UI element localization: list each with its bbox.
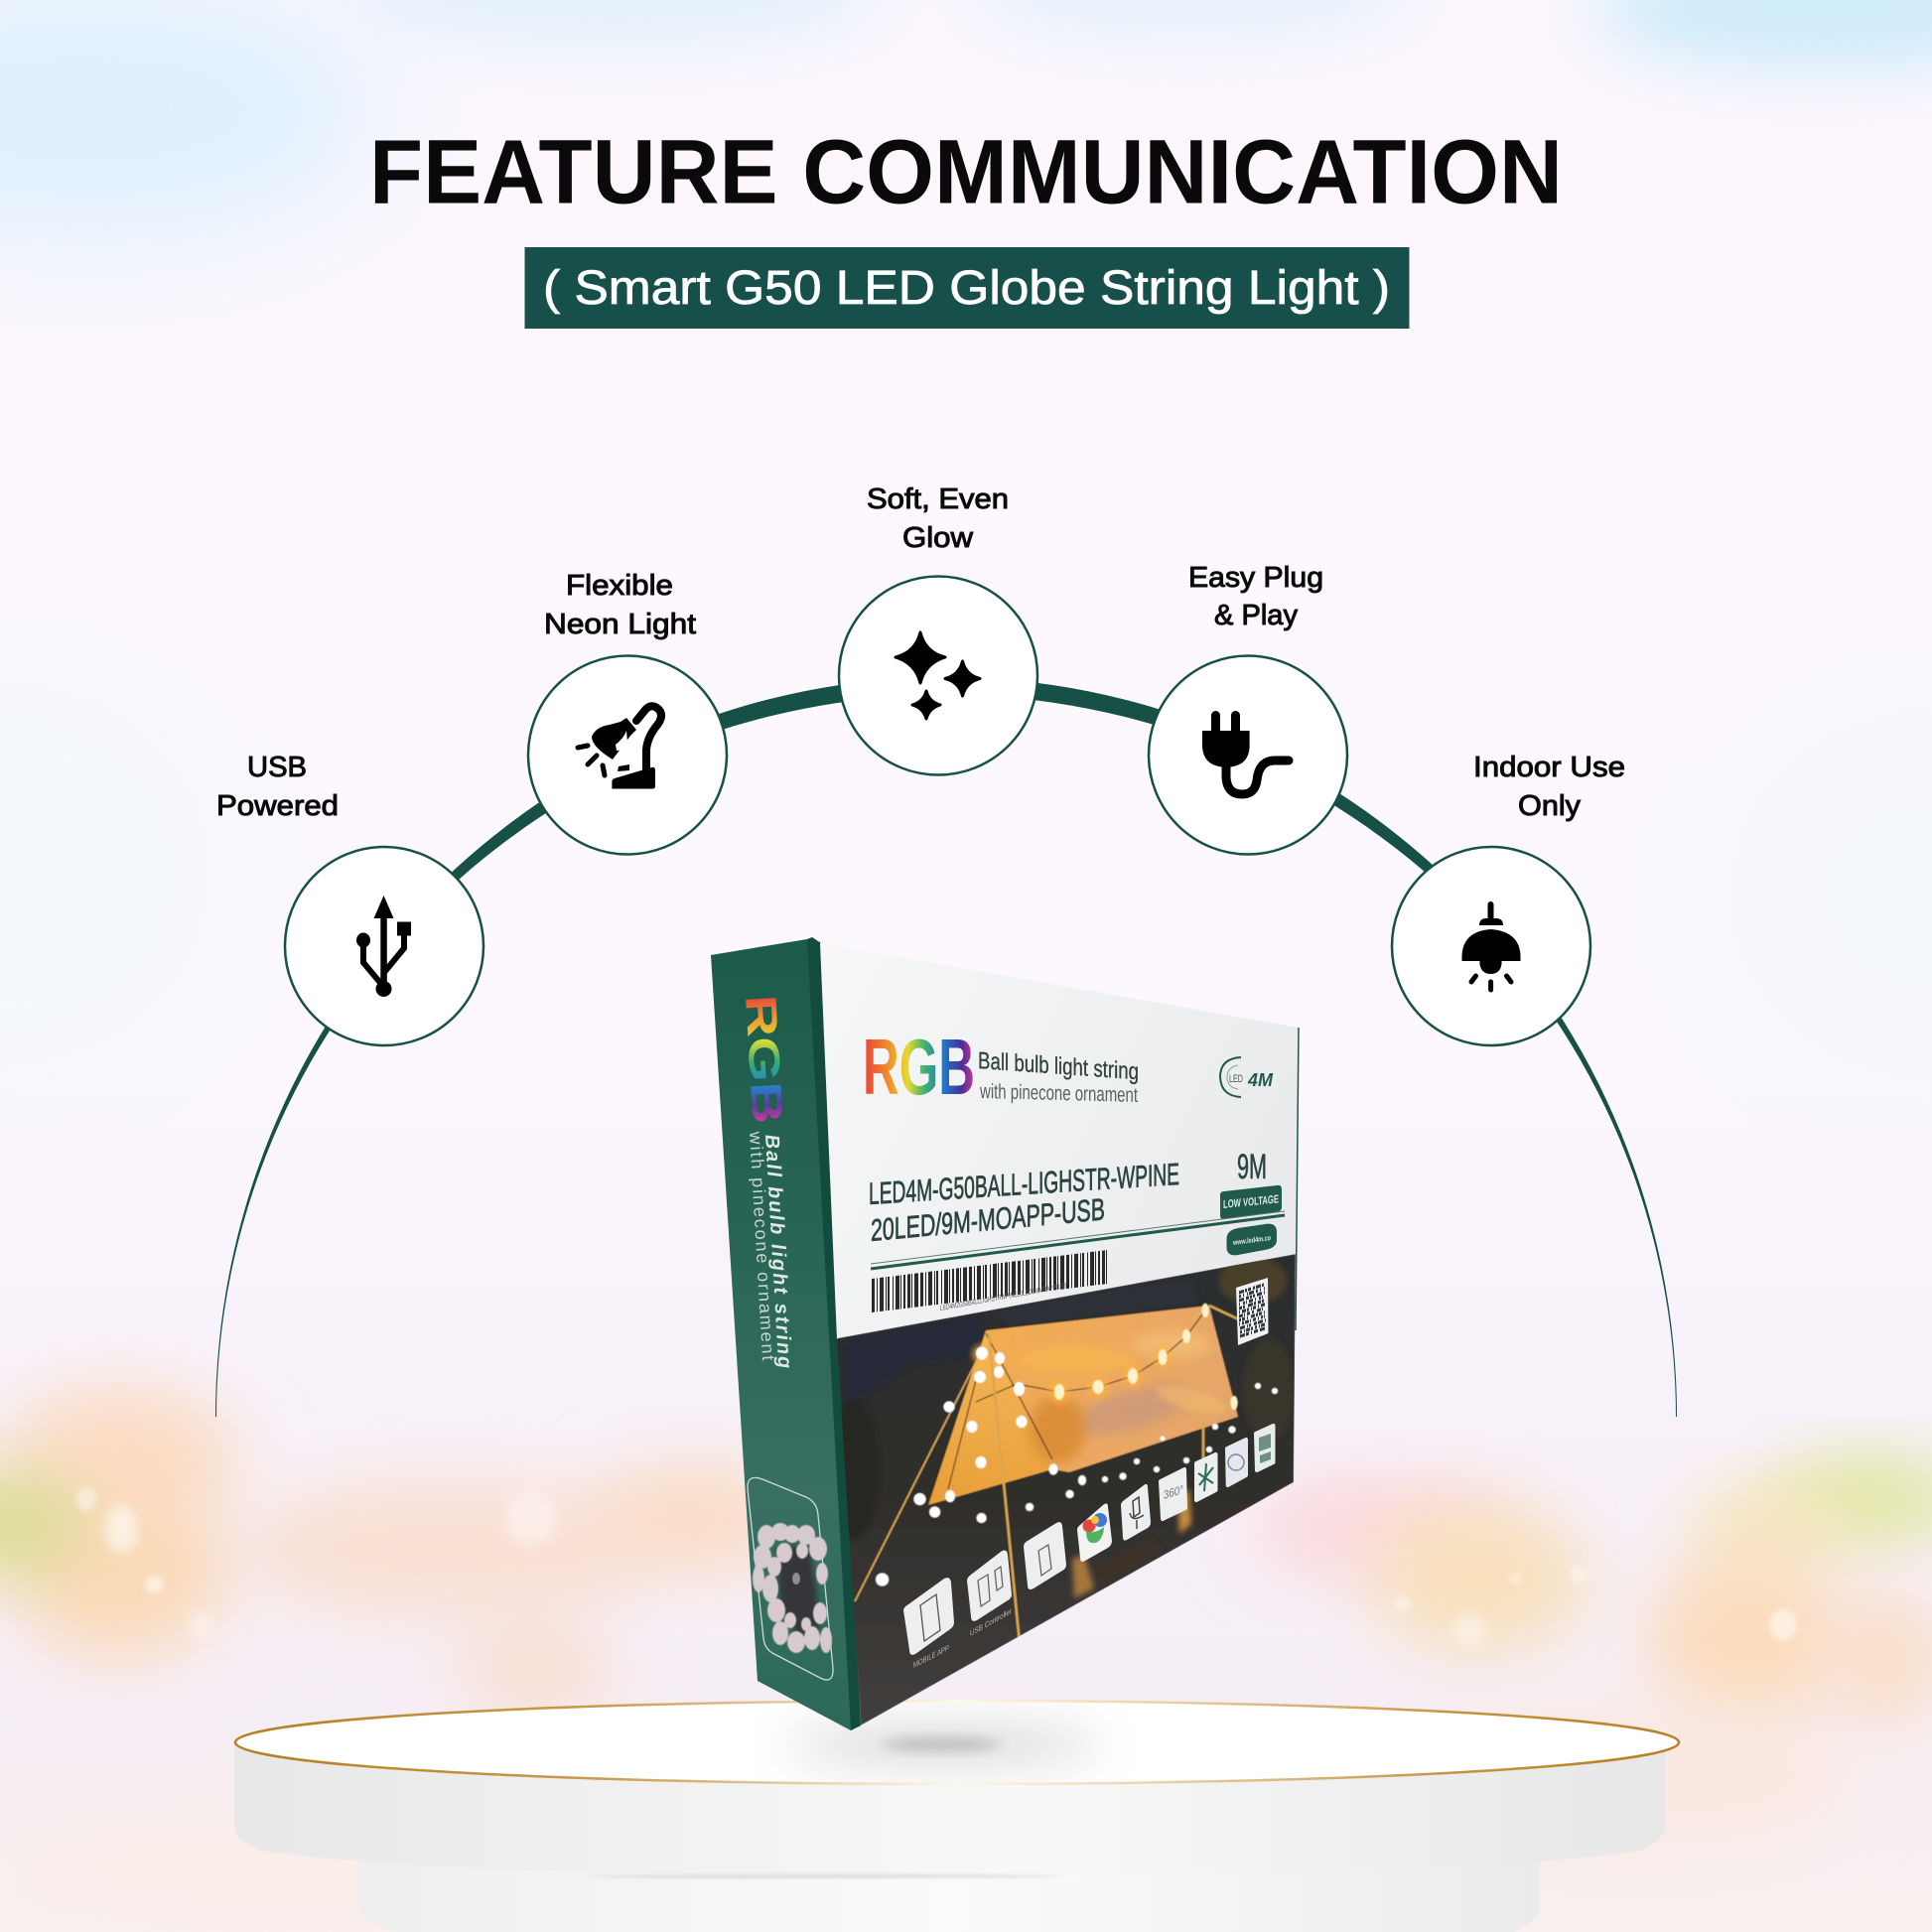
spine product name: with pinecone ornament [746,1130,778,1361]
feature: USB Powered [216,752,483,1045]
website pill: www.led4m.co [1232,1233,1271,1247]
podium upper tier [234,1742,1665,1876]
feature: Easy Plug & Play [1149,562,1347,854]
contact shadow [784,1725,1102,1764]
podium lower tier [358,1847,1540,1932]
tile: 360 degree [1161,1469,1185,1519]
label: Easy Plug & Play [1188,562,1323,631]
icon: sparkles [896,632,980,719]
right colour haze [1251,1479,1509,1579]
icon: power plug [1202,711,1289,794]
subtitle banner: ( Smart G50 LED Globe String Light ) [543,262,1390,315]
label: Soft, Even Glow [867,483,1009,554]
label: Flexible Neon Light: Neon Light [544,609,696,640]
spine photo window with bulb cluster [748,1477,833,1680]
label: Indoor Use Only: Indoor Use [1473,752,1625,783]
model number [869,1157,1179,1248]
label: Flexible Neon Light [544,570,696,640]
QR code [1236,1278,1269,1345]
camp chairs [1072,1489,1191,1598]
icon: USB symbol [356,896,411,997]
tile: microphone [1121,1484,1151,1541]
label: USB Powered: USB [247,752,307,783]
product tagline [978,1047,1139,1107]
label: Easy Plug & Play: & Play [1214,600,1298,631]
subtitle banner [524,247,1410,329]
tile: colour wheel [1077,1503,1112,1562]
spine product name [746,1130,795,1369]
tile: mobile app [903,1578,954,1670]
LED 4M brand logo: 4M [1247,1070,1274,1090]
website pill [1227,1224,1277,1255]
tent canopy [928,1306,1238,1505]
label: Indoor Use Only [1473,752,1625,822]
label: Soft, Even Glow: Glow [902,522,974,554]
feature: Indoor Use Only [1392,752,1625,1045]
label: Easy Plug & Play: Easy Plug [1188,562,1323,594]
icon: desk lamp [578,706,661,788]
product box [711,937,1299,1730]
label: USB Powered: Powered [216,790,339,822]
tent wires [948,1311,1205,1489]
barcode [872,1267,1107,1312]
9M length badge: 9M [1237,1148,1267,1186]
podium top with gold ring [235,1701,1679,1784]
tapered arc connecting the feature circles [215,677,1677,1417]
icon: pendant lamp [1461,901,1521,990]
label: Indoor Use Only: Only [1518,790,1582,822]
spine product name: Ball bulb light string [760,1134,795,1369]
tile: mobile app: MOBILE APP [913,1642,949,1670]
tile: remote control [1024,1522,1066,1589]
tile: 360 degree: 360° [1164,1482,1183,1502]
title: FEATURE COMMUNICATION [369,121,1563,222]
model number: LED4M-G50BALL-LIGHSTR-WPINE [869,1157,1179,1211]
podium [234,1701,1679,1932]
tile: USB controller: USB Controller [970,1605,1012,1638]
product tagline: with pinecone ornament [979,1080,1138,1107]
product tagline: Ball bulb light string [978,1047,1139,1085]
feature: Flexible Neon Light [528,570,727,854]
box front photo [830,1254,1296,1725]
tile: waterproof [1227,1440,1246,1485]
green rule lines [871,1211,1285,1269]
LED 4M brand logo: LED [1229,1073,1243,1085]
label: USB Powered [216,752,339,822]
tile: app control [1256,1426,1273,1470]
label: Flexible Neon Light: Flexible [566,570,673,602]
photo trees and sky [830,1257,1295,1539]
barcode: LED4M2G50BALLLIGHSTRWPINE20LED9MMOAPPUSB [940,1281,1066,1312]
feature: Soft, Even Glow [839,483,1037,774]
model number: 20LED/9M-MOAPP-USB [871,1191,1105,1248]
9M length badge: LOW VOLTAGE [1223,1193,1279,1211]
box spine [711,937,861,1730]
left colour haze [0,1385,238,1534]
spine RGB text: RGB [736,994,791,1125]
RGB logo: RGB [863,1023,975,1111]
tent poles and ropes [855,1306,1241,1643]
box front, white area [820,943,1299,1339]
9M length badge [1220,1148,1282,1219]
glowing globe bulbs [876,1304,1278,1587]
tile: USB controller [967,1551,1012,1638]
tile: bluetooth [1196,1454,1215,1500]
bokeh spots [76,1487,1797,1646]
feature icon tiles on box [903,1426,1273,1670]
label: Soft, Even Glow: Soft, Even [867,483,1009,515]
LED 4M brand logo [1220,1057,1274,1097]
